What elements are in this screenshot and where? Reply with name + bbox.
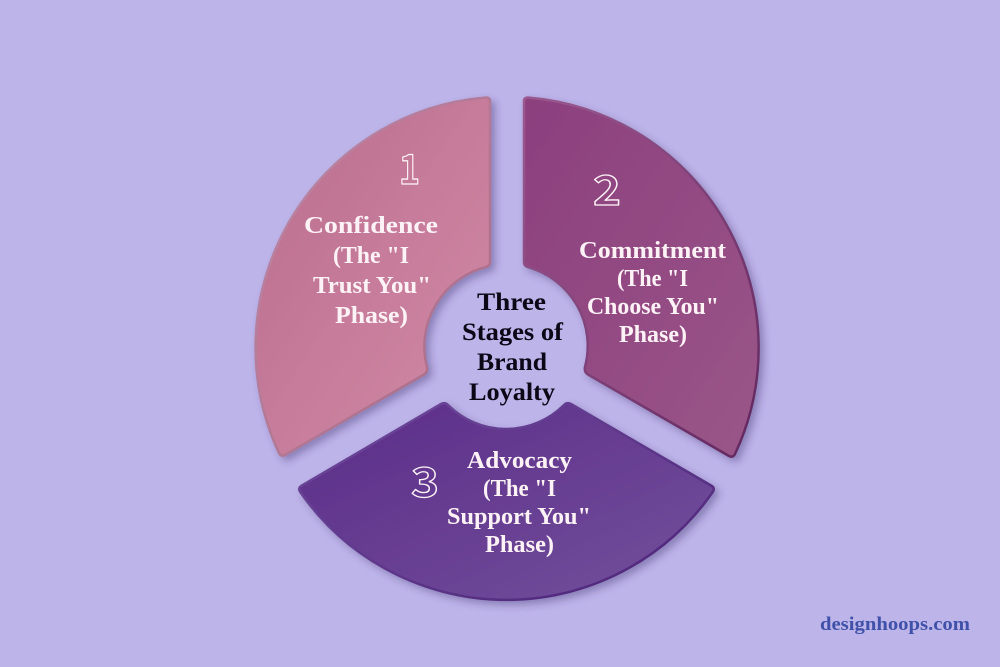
panel: stage 1 confidence (256, 98, 490, 456)
stage 3 label: Advocacy (467, 448, 572, 474)
panel: stage 3 advocacy (299, 403, 714, 600)
stage 1 label: (The "I (333, 243, 409, 269)
stage 2 label: Commitment (579, 238, 726, 264)
panel: stage 2 commitment (524, 98, 759, 457)
center title (462, 289, 564, 406)
stage 3 label: (The "I (483, 476, 556, 502)
number 2: 2 (593, 157, 621, 217)
center title: Loyalty (469, 379, 556, 406)
footer brand url: designhoops.com (820, 615, 971, 635)
stage 2 label: (The "I (617, 266, 688, 292)
stage 3 label: Phase) (485, 532, 554, 558)
number 1: 1 (399, 136, 420, 196)
center title: Stages of (462, 319, 564, 346)
stage 2 label: Choose You" (587, 294, 719, 320)
stage 3 label: Support You" (447, 504, 591, 530)
segment shape 2 (524, 98, 759, 457)
segment shape 3 (299, 403, 714, 600)
center title: Three (477, 289, 546, 316)
stage 1 label: Trust You" (313, 273, 431, 299)
stage 2 label (579, 238, 726, 348)
stage 2 label: Phase) (619, 322, 687, 348)
stage 1 label: Confidence (304, 213, 438, 239)
stage 3 label (447, 448, 591, 558)
stage 1 label (304, 213, 438, 329)
segment shape 1 (256, 98, 490, 456)
number 3: 3 (411, 449, 439, 509)
center title: Brand (477, 349, 547, 376)
stage 1 label: Phase) (335, 303, 408, 329)
